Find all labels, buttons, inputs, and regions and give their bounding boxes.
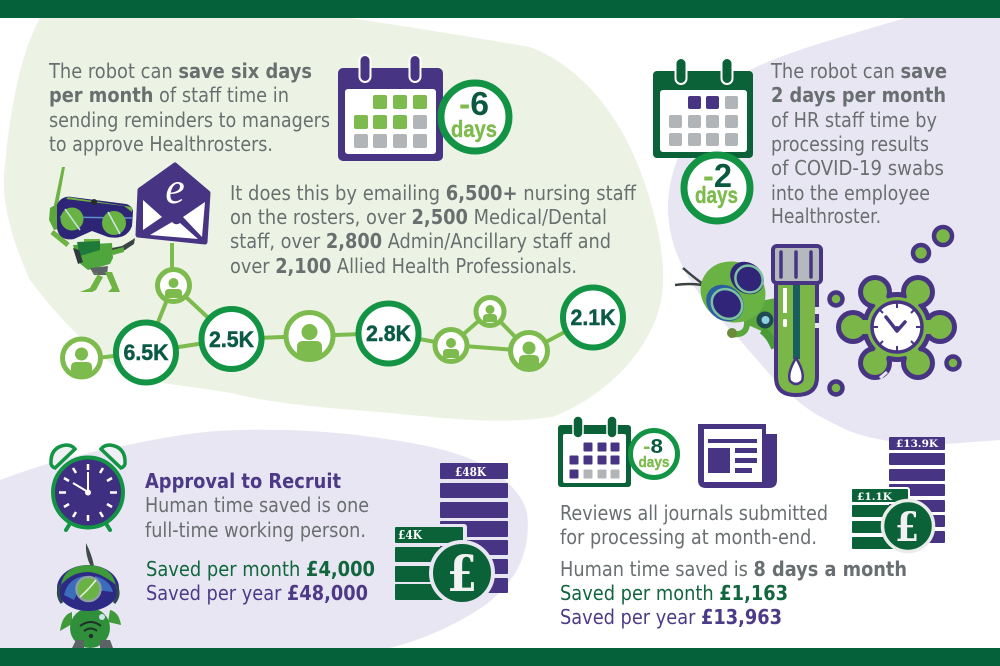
text block: two days: of HR staff time by [771, 108, 937, 132]
text block: six days [48, 59, 330, 156]
callout: minus 6 days: -6 [459, 85, 489, 122]
node: person 3 [435, 330, 467, 362]
callout: minus 6 days [441, 83, 509, 151]
text block: journals: Reviews all journals submitted [560, 501, 828, 525]
text block: six days: The robot can save six days [48, 59, 312, 83]
node: 2.5K [202, 309, 262, 369]
text block: two days: processing results [771, 132, 929, 156]
icon: robot with wifi [57, 543, 121, 648]
panel: purple background blob right [668, 18, 1000, 444]
icon: email envelope [138, 164, 208, 242]
icon: stacked coins 48K and 4K: £4K [398, 528, 422, 542]
icon: stacked coins 48K and 4K [392, 463, 508, 604]
text block: journals: Saved per year £13,963 [560, 605, 782, 629]
icon: purple calendar with green days [338, 55, 443, 161]
text block: journals: for processing at month-end. [560, 525, 817, 549]
node: person 2 [286, 312, 333, 360]
text block: approval to recruit: Saved per month £4,000 [146, 557, 375, 581]
callout: minus 2 days: -2 [703, 157, 732, 194]
text block: how it does this: on the rosters, over 2,500 Medical/Dental [230, 205, 607, 229]
text block: two days: Healthroster. [771, 204, 881, 228]
text block: how it does this: staff, over 2,800 Admin/Ancillary staff and [230, 229, 611, 253]
icon: alarm clock [51, 445, 125, 530]
text block: journals: Human time saved is 8 days a month [560, 557, 907, 581]
icon: green calendar [653, 58, 753, 158]
heading: approval to recruit: Approval to Recruit [145, 469, 341, 493]
icon: newspaper [698, 424, 777, 488]
icon: stacked coins 13.9K and 1.1K: £13.9K [896, 438, 939, 450]
text block: two days: The robot can save [770, 59, 947, 83]
icon: stacked coins 13.9K and 1.1K: £1.1K [857, 491, 893, 503]
text block: how it does this: over 2,100 Allied Health Professionals. [230, 254, 577, 278]
text block: two days: of COVID-19 swabs [771, 156, 944, 180]
callout: minus 2 days: days [695, 182, 738, 208]
text block: two days: 2 days per month [771, 83, 946, 107]
node: 6.5K: 6.5K [124, 340, 169, 365]
node: person 4 [476, 298, 504, 326]
panel: purple background blob bottom left [0, 430, 528, 648]
node: 6.5K [116, 322, 176, 382]
text block: approval to recruit: Saved per year £48,000 [146, 581, 368, 605]
icon: test tube with swab [773, 246, 821, 395]
node: person 1 [62, 339, 100, 377]
icon: stacked coins 13.9K and 1.1K [850, 437, 945, 552]
text block: two days [770, 59, 947, 228]
icon: robot peeking [675, 251, 776, 350]
text block: journals [560, 501, 907, 629]
text block: how it does this [230, 181, 637, 278]
icon: virus with clock [836, 275, 957, 380]
node: person 5 [510, 332, 548, 370]
panel: green background blob [4, 18, 663, 421]
icon: email envelope: e [165, 164, 185, 213]
text block: six days: per month of staff time in [49, 83, 289, 107]
callout: minus 2 days [684, 155, 750, 221]
callout: minus 8 days [630, 430, 678, 478]
icon: stacked coins 13.9K and 1.1K: £ [895, 504, 919, 551]
text block: how it does this: It does this by emailing 6,500+ nursing staff [230, 181, 637, 205]
text block: six days: to approve Healthrosters. [49, 132, 273, 156]
icon: stacked coins 48K and 4K: £ [447, 544, 477, 603]
text block: two days: into the employee [771, 181, 930, 205]
node: 2.5K: 2.5K [209, 327, 255, 352]
icon: green robot with antenna [49, 167, 135, 292]
icon: stacked coins 48K and 4K: £48K [455, 464, 487, 479]
text block: approval to recruit: Human time saved is one [145, 493, 369, 517]
callout: minus 8 days: -8 [643, 436, 663, 458]
top banner [0, 0, 1000, 18]
node: 2.8K: 2.8K [366, 321, 412, 346]
text block: approval to recruit: full-time working person. [145, 518, 366, 542]
node: 2.1K: 2.1K [570, 305, 616, 330]
text block: six days: sending reminders to managers [49, 108, 330, 132]
node: person top [158, 270, 190, 302]
callout: minus 8 days: days [638, 454, 670, 471]
icon: virus particles [830, 227, 960, 394]
callout: minus 6 days: days [451, 116, 497, 142]
bottom banner [0, 648, 1000, 666]
text block: journals: Saved per month £1,163 [560, 581, 788, 605]
text block: approval to recruit [145, 469, 375, 605]
chart: staff network [62, 243, 623, 382]
icon: green calendar small [558, 416, 631, 487]
node: 2.8K [358, 304, 418, 364]
node: 2.1K [563, 288, 623, 348]
